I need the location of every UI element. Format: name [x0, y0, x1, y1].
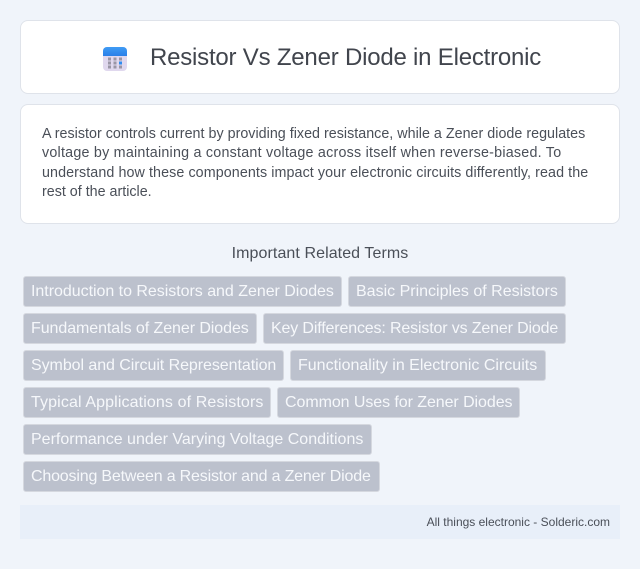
chip: [23, 387, 271, 418]
chip: [263, 313, 566, 344]
chip: [23, 313, 257, 344]
chip: Common Uses for Zener Diodes: [285, 394, 512, 411]
chip: [23, 424, 372, 455]
chip: [23, 276, 342, 307]
intro text: rest of the article.: [42, 184, 152, 200]
chip: [23, 350, 284, 381]
chip: Typical Applications of Resistors: [31, 394, 264, 411]
chip: Choosing Between a Resistor and a Zener Diode: [31, 468, 371, 485]
related terms chips: [23, 276, 566, 492]
intro text: [42, 126, 588, 200]
intro text: voltage by maintaining a constant voltage across itself when reverse-biased. To: [42, 145, 561, 161]
icon: calendar: [103, 47, 127, 71]
chip: Performance under Varying Voltage Conditions: [31, 431, 363, 448]
chip: [348, 276, 566, 307]
intro text: A resistor controls current by providing fixed resistance, while a Zener diode regulates: [42, 126, 585, 142]
chip: Symbol and Circuit Representation: [31, 357, 276, 374]
footer bar: [20, 505, 620, 539]
chip: [290, 350, 546, 381]
footer text: All things electronic - Solderic.com: [427, 515, 610, 529]
chip: [277, 387, 520, 418]
chip: [23, 461, 380, 492]
intro text: understand how these components impact your electronic circuits differently, read the: [42, 165, 588, 181]
chip: Basic Principles of Resistors: [356, 283, 558, 300]
related terms heading: Important Related Terms: [232, 245, 408, 262]
chip: Fundamentals of Zener Diodes: [31, 320, 249, 337]
chip: Introduction to Resistors and Zener Diodes: [31, 283, 334, 300]
chip: Key Differences: Resistor vs Zener Diode: [271, 320, 558, 337]
title: Resistor Vs Zener Diode in Electronic: [150, 44, 541, 71]
chip: Functionality in Electronic Circuits: [298, 357, 537, 374]
intro text card: [20, 104, 620, 224]
title card: [20, 20, 620, 94]
